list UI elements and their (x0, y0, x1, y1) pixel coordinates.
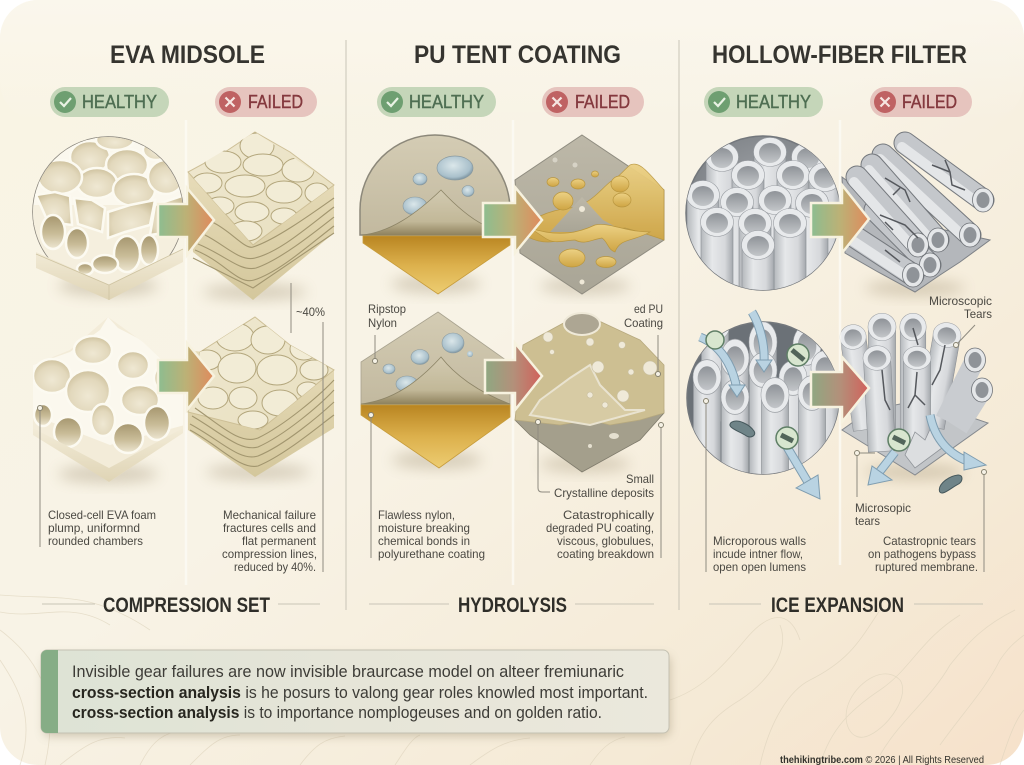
illustration: healthy open fibers (685, 135, 840, 291)
status pill: failed (870, 87, 972, 117)
callout: healthy fiber description: Microporous walls (713, 534, 806, 548)
status pill: healthy (704, 87, 823, 117)
callout banner: summary (41, 650, 670, 736)
callout: crystalline deposits: Small (626, 472, 654, 486)
mechanism label: compression set: COMPRESSION SET (103, 594, 270, 617)
callout: failed foam description (222, 322, 323, 574)
divider: before and after (512, 120, 514, 585)
illustration: healthy foam block (33, 317, 185, 483)
callout: microscopic tears, upper (929, 294, 992, 348)
callout: healthy foam description (38, 406, 156, 548)
callout: microscopic tears, lower (854, 450, 911, 528)
callout: healthy coating description: polyurethane coating (378, 547, 485, 561)
callout: failed coating description: Catastrophically (563, 508, 654, 522)
flow arrow: bypass right (930, 415, 986, 470)
heading: hollow-fiber filter: HOLLOW-FIBER FILTER (712, 41, 967, 69)
callout: failed fiber description: Catastropnic tears (883, 534, 976, 548)
illustration: failed coating with sticky residue (515, 135, 664, 294)
heading: EVA midsole: EVA MIDSOLE (110, 41, 265, 69)
callout: healthy coating description: Flawless nylon, (378, 508, 455, 522)
arrow: healthy to failed, bottom (811, 357, 869, 422)
callout: failed foam description: flat permanent (242, 534, 317, 548)
status pill: healthy: HEALTHY (82, 92, 157, 112)
callout: ~40%: ~40% (296, 305, 325, 319)
section dividers (346, 40, 679, 610)
banner text line 1: Invisible gear failures are now invisible braurcase model on alteer fremiunaric (72, 662, 624, 681)
heading: PU tent coating: PU TENT COATING (414, 41, 621, 69)
mechanism label: hydrolysis: HYDROLYSIS (458, 594, 567, 617)
callout: degraded PU coating: ed PU (634, 302, 663, 316)
callout: microscopic tears, upper: Microscopic (929, 294, 992, 308)
status pill: healthy (377, 87, 496, 117)
illustration: failed crushed foam block (188, 317, 334, 480)
arrow: healthy to failed, bottom (158, 343, 214, 410)
callout: healthy foam description: rounded chambers (48, 534, 143, 548)
arrow: healthy to failed, top (483, 187, 542, 253)
arrow: healthy to failed, top (158, 188, 214, 255)
callout: crystalline deposits: Crystalline deposits (554, 486, 654, 500)
status pill: failed: FAILED (248, 92, 303, 112)
flow arrow: into fiber, centre (752, 312, 772, 372)
callout: degraded PU coating: Coating (624, 316, 663, 330)
topographic contour lines (0, 595, 1024, 765)
illustration: failed torn fibers (838, 313, 992, 499)
callout: healthy coating description (368, 412, 485, 561)
flow arrow: into fiber, left (700, 337, 745, 397)
banner text line 2: cross-section analysis is he posurs to valong gear roles knowled most important. (72, 683, 648, 702)
callout: healthy coating description: moisture breaking (378, 521, 470, 535)
callout: failed fiber description (868, 470, 986, 574)
illustration: failed compressed foam stack (188, 132, 334, 300)
callout: healthy fiber description: incude intner flow, (713, 547, 803, 561)
divider: before and after (839, 120, 841, 565)
illustration: healthy closed-cell foam, circular cross-section (30, 130, 186, 300)
callout: healthy foam description: Closed-cell EVA foam (48, 508, 156, 522)
callout: failed coating description (546, 422, 664, 561)
pathogen markers (888, 429, 964, 499)
callout: healthy fiber description (704, 398, 806, 574)
status pill: failed: FAILED (575, 92, 630, 112)
callout: failed foam description: fractures cells and (223, 521, 316, 535)
arrow: healthy to failed, bottom (485, 343, 542, 410)
status pill: failed (542, 87, 644, 117)
callout: ripstop nylon: Nylon (368, 316, 397, 330)
mechanism label: ice expansion: ICE EXPANSION (771, 594, 904, 617)
status pill: failed: FAILED (902, 92, 957, 112)
callout: microscopic tears, upper: Tears (964, 307, 992, 321)
callout: failed fiber description: ruptured membrane. (875, 560, 978, 574)
status pill: healthy: HEALTHY (409, 92, 484, 112)
status pill: failed (215, 87, 317, 117)
illustration: healthy nylon block, lower (361, 312, 510, 469)
callout: failed coating description: viscous, globulues, (557, 534, 654, 548)
illustration: failed peeling coating, lower (515, 313, 664, 472)
callout: ripstop nylon: Ripstop (368, 302, 406, 316)
arrow: healthy to failed, top (811, 185, 869, 253)
callout: degraded PU coating (624, 302, 663, 376)
callout: ~40% (291, 283, 325, 333)
callout: failed coating description: degraded PU coating, (546, 521, 654, 535)
callout: microscopic tears, lower: tears (855, 514, 880, 528)
panel: PU tent coating (360, 41, 664, 617)
illustration: healthy nylon with beaded water (360, 135, 510, 294)
callout: healthy foam description: plump, uniformnd (48, 521, 140, 535)
illustration: healthy fibers with filtered pathogens (686, 310, 839, 500)
callout: crystalline deposits (536, 420, 654, 500)
callout: failed foam description: compression lines, (222, 547, 317, 561)
status pill: healthy (50, 87, 169, 117)
flow arrow: bypass left (868, 452, 895, 485)
divider: before and after (185, 120, 187, 585)
callout: healthy fiber description: open open lumens (713, 560, 806, 574)
callout: ripstop nylon (368, 302, 406, 364)
callout: healthy coating description: chemical bonds in (378, 534, 470, 548)
flow arrow: out of fiber (787, 447, 820, 499)
status pill: healthy: HEALTHY (736, 92, 811, 112)
panel: EVA midsole (30, 41, 334, 617)
panel: hollow-fiber filter (686, 41, 994, 617)
callout: microscopic tears, lower: Microsopic (855, 501, 911, 515)
callout: failed coating description: coating breakdown (557, 547, 654, 561)
callout: failed fiber description: on pathogens bypass (868, 547, 976, 561)
pathogen markers (706, 331, 809, 449)
callout: failed foam description: Mechanical failure (223, 508, 316, 522)
illustration: failed cracked fibers (842, 143, 994, 296)
banner text line 3: cross-section analysis is to importance nomplogeuses and on golden ratio. (72, 703, 602, 722)
callout: failed foam description: reduced by 40%. (234, 560, 316, 574)
